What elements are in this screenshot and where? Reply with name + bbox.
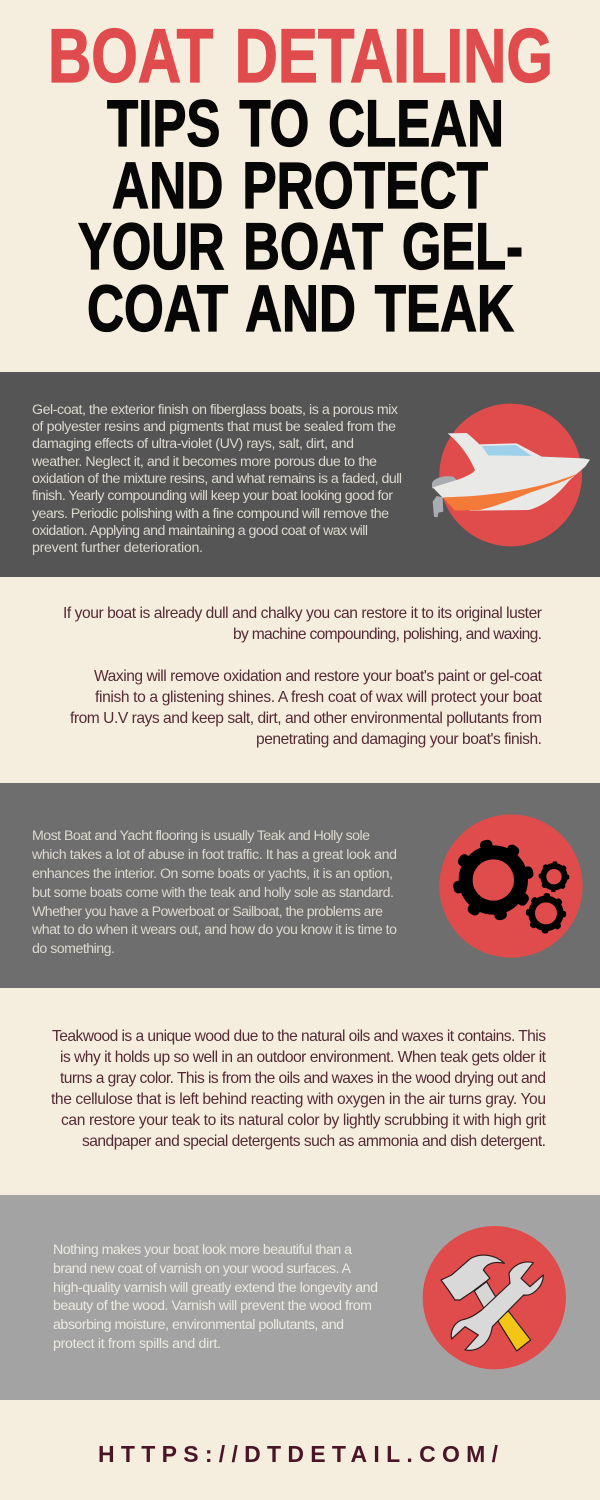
- title: AND PROTECT: [112, 148, 488, 222]
- panel: restore: by machine compounding, polishing, and waxing.: [233, 626, 542, 643]
- text: teak flooring: which takes a lot of abuse in foot traffic. It has a great look and: [31, 847, 397, 863]
- text: varnish: absorbing moisture, environmental pollutants, and: [53, 1317, 344, 1333]
- icon: hammer and wrench: [423, 1226, 566, 1369]
- text: teak flooring: enhances the interior. On some boats or yachts, it is an option,: [32, 866, 393, 882]
- text: teak flooring: Most Boat and Yacht flooring is usually Teak and Holly sole: [32, 828, 370, 844]
- text: varnish: protect it from spills and dirt.: [53, 1336, 221, 1352]
- panel: flooring: [0, 783, 600, 988]
- title: [48, 14, 553, 345]
- panel: teakwood: can restore your teak to its natural color by lightly scrubbing it with high grit: [61, 1112, 547, 1129]
- text: gel-coat explanation: oxidation of the mixture resins, and what remains is a faded, dull: [32, 471, 402, 487]
- text: varnish: high-quality varnish will greatly extend the longevity and: [53, 1280, 378, 1296]
- panel: restore: finish to a glistening shines. A fresh coat of wax will protect your boat: [95, 689, 543, 706]
- icon: gears: [439, 814, 583, 958]
- text: teak flooring: but some boats come with the teak and holly sole as standard.: [32, 885, 394, 901]
- text: gel-coat explanation: weather. Neglect it, and it becomes more porous due to the: [31, 454, 377, 470]
- panel: teakwood: the cellulose that is left behind reacting with oxygen in the air turns gray. You: [51, 1091, 546, 1108]
- text: gel-coat explanation: damaging effects of ultra-violet (UV) rays, salt, dirt, and: [32, 436, 354, 452]
- panel: restore: [63, 605, 543, 748]
- text: teak flooring: [31, 828, 397, 957]
- text: varnish: [53, 1242, 378, 1352]
- text: gel-coat explanation: oxidation. Applying and maintaining a good coat of wax will: [32, 523, 368, 539]
- text: teak flooring: what to do when it wears out, and how do you know it is time to: [31, 922, 397, 938]
- panel: teakwood: turns a gray color. This is from the oils and waxes in the wood drying out and: [60, 1070, 546, 1087]
- panel: teakwood: sandpaper and special detergents such as ammonia and dish detergent.: [82, 1133, 546, 1150]
- panel: restore: penetrating and damaging your boat's finish.: [256, 731, 542, 748]
- text: varnish: brand new coat of varnish on your wood surfaces. A: [53, 1261, 352, 1277]
- text: gel-coat explanation: of polyester resins and pigments that must be sealed from the: [32, 419, 396, 435]
- text: gel-coat explanation: finish. Yearly compounding will keep your boat looking good for: [32, 488, 393, 504]
- panel: restore: Waxing will remove oxidation and restore your boat's paint or gel-coat: [94, 668, 543, 685]
- text: varnish: beauty of the wood. Varnish will prevent the wood from: [53, 1298, 372, 1314]
- panel: teakwood: Teakwood is a unique wood due to the natural oils and waxes it contains. This: [52, 1028, 546, 1045]
- panel: varnish: [0, 1195, 600, 1400]
- footer url: HTTPS://DTDETAIL.COM/: [98, 1441, 499, 1467]
- text: teak flooring: do something.: [32, 941, 115, 957]
- icon: boat: [432, 404, 590, 546]
- panel: restore: If your boat is already dull and chalky you can restore it to its original luster: [63, 605, 542, 622]
- text: teak flooring: Whether you have a Powerboat or Sailboat, the problems are: [32, 904, 383, 920]
- panel: restore: from U.V rays and keep salt, dirt, and other environmental pollutants from: [70, 710, 542, 727]
- text: gel-coat explanation: Gel-coat, the exterior finish on fiberglass boats, is a porous mix: [32, 402, 398, 418]
- text: varnish: Nothing makes your boat look more beautiful than a: [53, 1242, 352, 1258]
- panel: gel-coat: [0, 372, 600, 577]
- text: gel-coat explanation: [31, 402, 402, 556]
- text: gel-coat explanation: years. Periodic polishing with a fine compound will remove the: [32, 506, 389, 522]
- text: gel-coat explanation: prevent further deterioration.: [32, 540, 203, 556]
- panel: teakwood: is why it holds up so well in an outdoor environment. When teak gets older it: [60, 1049, 547, 1066]
- panel: teakwood: [51, 1028, 547, 1150]
